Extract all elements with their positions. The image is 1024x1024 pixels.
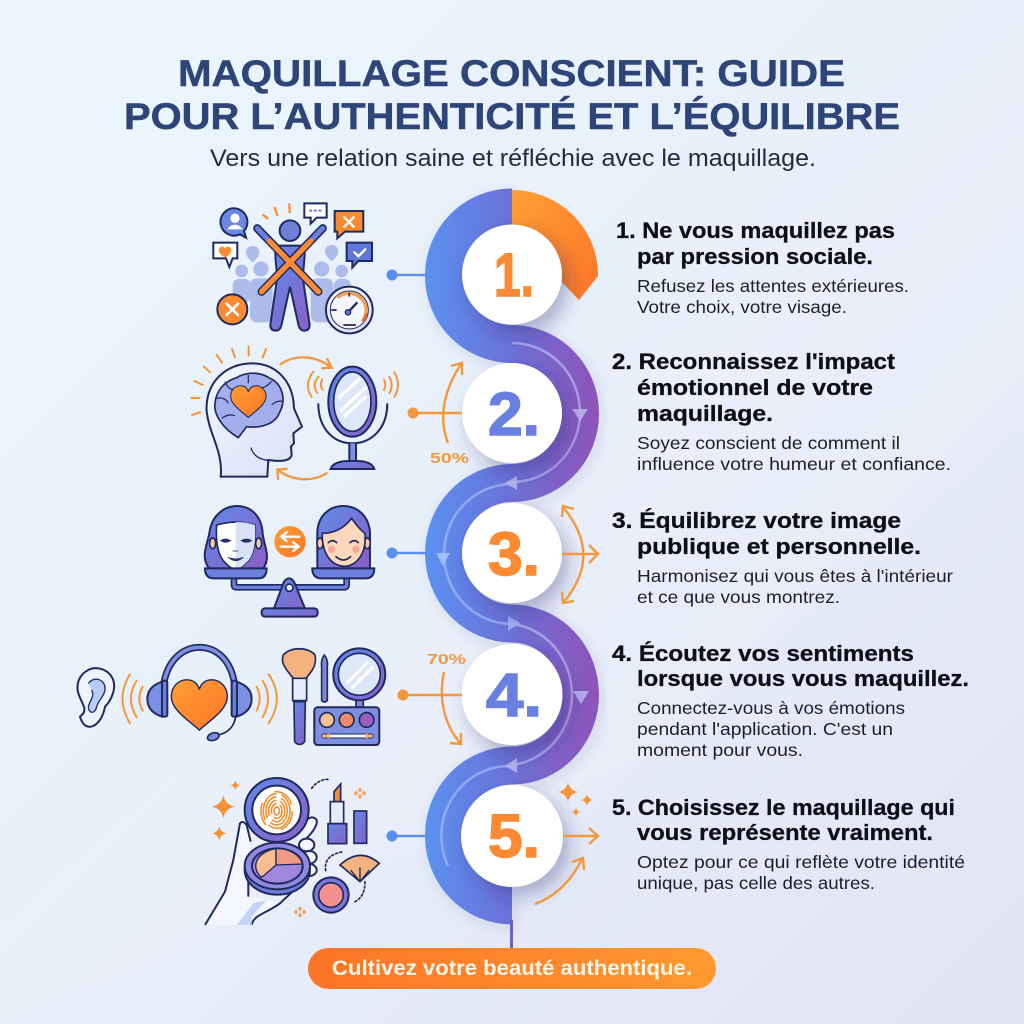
step 3 text: Harmonisez qui vous êtes à l'intérieur <box>637 566 953 586</box>
step 2 text: émotionnel de votre <box>637 375 873 400</box>
step 2 text: influence votre humeur et confiance. <box>637 454 951 474</box>
step 2 text: 2. Reconnaissez l'impact <box>612 349 896 374</box>
step 4 badge: 4. <box>486 661 542 729</box>
icon: brain, heart and mirror <box>191 347 398 479</box>
footer pill: Cultivez votre beauté authentique. <box>332 957 692 980</box>
connector 4 with arrow and 70% <box>398 651 466 744</box>
title: MAQUILLAGE CONSCIENT: GUIDE <box>178 53 845 94</box>
connector 4 with arrow and 70%: 70% <box>427 651 466 668</box>
step 1 text: par pression sociale. <box>637 244 873 269</box>
step 2 text <box>612 349 951 474</box>
step 5 badge <box>461 785 563 887</box>
step 4 text: 4. Écoutez vos sentiments <box>612 641 914 666</box>
icon: ear, heart headphones and makeup set <box>77 647 385 745</box>
step 3 text: publique et personnelle. <box>637 534 921 559</box>
step 3 text: et ce que vous montrez. <box>637 587 840 607</box>
step 4 text <box>612 641 969 760</box>
step 3 text: 3. Équilibrez votre image <box>612 508 901 533</box>
step 4 text: moment pour vous. <box>637 740 803 760</box>
step 3 text <box>612 508 953 607</box>
step 2 text: Soyez conscient de comment il <box>637 433 900 453</box>
icon: social pressure <box>213 203 373 333</box>
connector 2 with arrow and 50%: 50% <box>430 450 469 467</box>
step 1 text <box>616 218 909 317</box>
icon: compact, fingerprint and cosmetics <box>205 778 379 925</box>
step 4 text: lorsque vous vous maquillez. <box>637 666 969 691</box>
footer pill <box>308 948 716 989</box>
title <box>124 53 900 137</box>
subtitle: Vers une relation saine et réfléchie avec le maquillage. <box>210 145 816 172</box>
step 2 badge: 2. <box>488 380 540 448</box>
flow arrows <box>436 343 589 866</box>
connector 2 with arrow and 50% <box>408 363 469 467</box>
step 5 text: vous représente vraiment. <box>637 820 933 845</box>
step 3 badge <box>462 503 562 603</box>
orange ribbon head <box>512 190 598 300</box>
icon: mask and face on scale <box>205 506 374 617</box>
serpentine ribbon <box>436 190 598 949</box>
step 4 badge <box>462 644 562 745</box>
step 5 text: unique, pas celle des autres. <box>637 873 875 893</box>
connector 1 <box>386 270 428 280</box>
step 1 text: 1. Ne vous maquillez pas <box>616 218 895 243</box>
step 1 badge <box>462 224 562 324</box>
step 5 text <box>612 795 965 893</box>
step 2 badge <box>462 363 562 463</box>
step 5 badge: 5. <box>488 802 540 870</box>
step 1 text: Refusez les attentes extérieures. <box>637 276 909 296</box>
step 4 text: pendant l'application. C'est un <box>637 719 893 739</box>
connector 5 with arrows and sparkles <box>386 782 598 904</box>
step 5 text: Optez pour ce qui reflète votre identité <box>637 852 965 872</box>
step 3 badge: 3. <box>488 520 540 588</box>
step 1 text: Votre choix, votre visage. <box>637 297 847 317</box>
step 4 text: Connectez-vous à vos émotions <box>637 698 905 718</box>
ribbon bottom stem <box>510 920 513 949</box>
connector 3 with arrows <box>386 506 598 603</box>
step 1 badge: 1. <box>494 241 534 309</box>
step 2 text: maquillage. <box>637 401 773 426</box>
title: POUR L’AUTHENTICITÉ ET L’ÉQUILIBRE <box>124 96 900 137</box>
step 5 text: 5. Choisissez le maquillage qui <box>612 795 955 820</box>
